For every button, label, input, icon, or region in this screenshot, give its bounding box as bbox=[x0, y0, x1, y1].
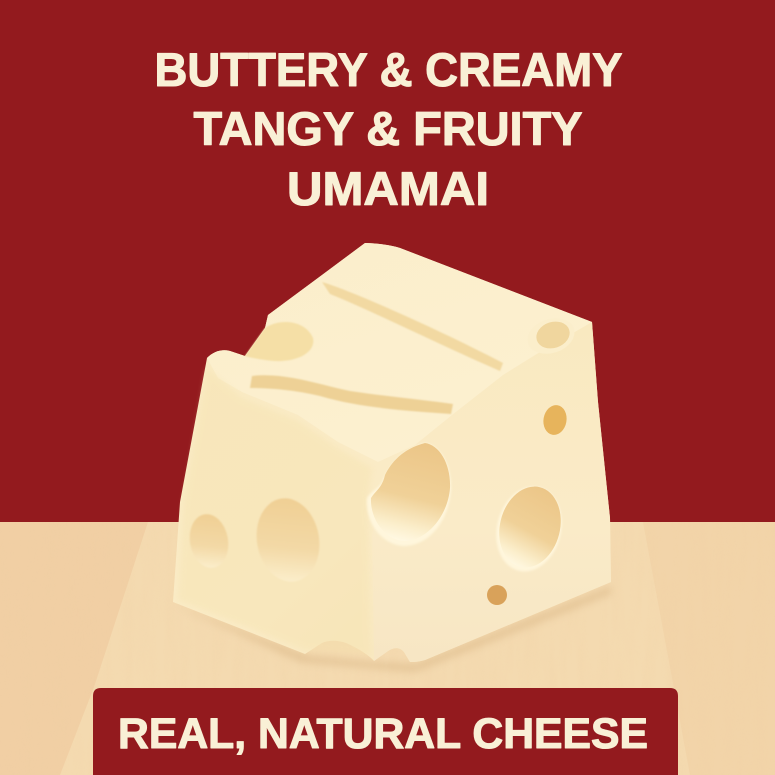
hole interior bbox=[371, 443, 450, 541]
right large hole bbox=[488, 480, 570, 578]
far-left hole bbox=[186, 511, 232, 571]
hole interior bbox=[491, 480, 569, 574]
top face bbox=[207, 243, 592, 462]
hole rim highlight bbox=[367, 443, 451, 546]
right face bbox=[372, 322, 611, 662]
cheese wedge bbox=[173, 243, 611, 662]
soft shading on left face bbox=[178, 368, 372, 655]
corner hole inner bbox=[533, 317, 573, 353]
wood grain bbox=[0, 522, 775, 775]
banner background bbox=[93, 688, 678, 775]
corner hole bbox=[523, 312, 579, 360]
red background bbox=[0, 0, 775, 522]
wooden table surface bbox=[0, 522, 775, 775]
right plank bbox=[643, 522, 775, 775]
banner bbox=[93, 688, 678, 775]
cheese contact shadow bbox=[173, 586, 611, 672]
small orange hole upper right bbox=[541, 403, 569, 437]
top hole notch bbox=[245, 322, 313, 361]
tiny orange hole lower right bbox=[487, 585, 507, 605]
headline line 3: UMAMAI bbox=[287, 162, 489, 215]
centre large hole bbox=[367, 443, 451, 546]
headline line 2: TANGY & FRUITY bbox=[194, 102, 582, 155]
banner label: REAL, NATURAL CHEESE bbox=[118, 710, 648, 758]
corner hole rim bbox=[523, 312, 579, 360]
top groove upper bbox=[322, 282, 503, 371]
top groove lower bbox=[250, 375, 453, 414]
hole rim highlight bbox=[488, 480, 570, 578]
left plank bbox=[0, 522, 148, 775]
left large hole bbox=[250, 493, 326, 587]
headline line 1: BUTTERY & CREAMY bbox=[154, 43, 622, 96]
headline bbox=[154, 43, 622, 215]
cheese silhouette bbox=[173, 243, 611, 662]
